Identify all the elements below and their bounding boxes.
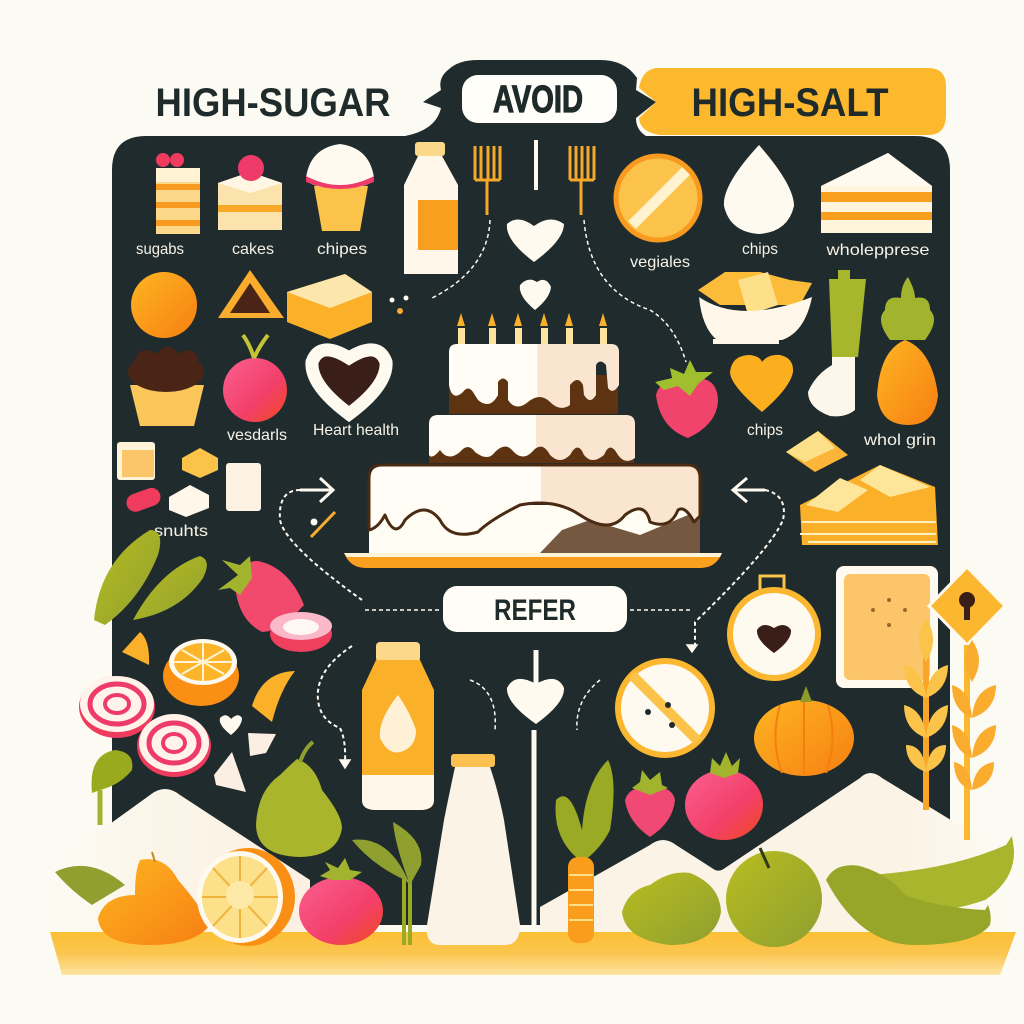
- label: chips: chips: [747, 422, 783, 439]
- icon: sliced radish: [270, 612, 332, 652]
- icon: pear: [256, 742, 342, 857]
- icon: heart: [730, 355, 793, 412]
- icon: small white pieces: [214, 715, 276, 792]
- icon: heart outline: [312, 350, 386, 414]
- icon: small strawberry: [625, 770, 675, 837]
- label: heart health: Heart health: [313, 422, 399, 439]
- icon: bottle: [404, 142, 458, 274]
- dark background panel: [112, 60, 950, 925]
- icon: chocolate cupcake: [128, 347, 204, 426]
- label: sugabs: sugabs: [136, 241, 184, 258]
- left salt mound: [60, 789, 310, 932]
- icon: chocolate triangle: [218, 270, 284, 318]
- heading: refer pill: [443, 586, 627, 632]
- icon: no sign: [616, 156, 700, 240]
- ground band: [50, 932, 1016, 975]
- icon: no sign lower: [618, 661, 712, 755]
- icon: orange slice: [163, 639, 239, 706]
- label: vesdarls: vesdarls: [227, 427, 287, 444]
- icon: orange fruit: [55, 852, 210, 945]
- label: whol grin: whol grin: [863, 432, 936, 449]
- heading: avoid pill: AVOID: [493, 79, 583, 121]
- icon: leaves: [94, 530, 207, 625]
- arrows and dashed connectors: [280, 478, 784, 932]
- label: cakes: cakes: [232, 241, 274, 258]
- icon: chip pieces: [786, 431, 848, 472]
- heading: high-salt banner: [639, 68, 946, 135]
- label: vegiales: vegiales: [630, 254, 690, 271]
- icon: pumpkin: [754, 686, 854, 776]
- icon: citrus half: [197, 848, 295, 946]
- icon: cupcake: [306, 144, 374, 231]
- icon: chip bowl: [698, 272, 812, 344]
- heading: avoid pill: [462, 75, 617, 123]
- right salt mounds: [540, 773, 1000, 932]
- icon: white tiered cake: [344, 313, 722, 568]
- icon: green apple: [726, 848, 822, 947]
- icon: bananas: [826, 836, 1014, 945]
- icon: heart centre: [507, 679, 564, 724]
- icon: dots: [390, 296, 408, 314]
- icon: chip stack: [800, 465, 938, 545]
- label: whole ppresse: wholepprese: [825, 242, 930, 259]
- icon: slash and dot: [310, 512, 335, 537]
- icon: milk bottle: [427, 754, 520, 945]
- icon: clock with heart: [730, 576, 818, 678]
- icon: wheat stalks: [904, 618, 996, 810]
- icon: strawberry left: [218, 556, 304, 632]
- icon: apple pink: [685, 752, 763, 840]
- icon: cheese block: [287, 274, 372, 339]
- icon: cake wedge: [821, 153, 932, 233]
- icon: forks and heart with dashed lines: [432, 140, 686, 362]
- icon: sprout and carrot: [556, 760, 614, 943]
- label: chips: chips: [742, 241, 778, 258]
- label: snuhts: snuhts: [154, 523, 208, 540]
- icon: pineapple: [877, 277, 938, 425]
- icon: triangles: [122, 632, 295, 722]
- label: chipes: chipes: [317, 241, 367, 258]
- icon: strawberry: [655, 360, 718, 438]
- icon: small sprout: [91, 750, 132, 825]
- icon: warning sign: [929, 567, 1005, 840]
- heading: high-salt banner: HIGH-SALT: [692, 81, 888, 125]
- icon: tomato: [299, 858, 383, 945]
- icon: yogurt bottle: [362, 642, 434, 810]
- icon: cake cube: [218, 155, 282, 230]
- icon: green mango: [622, 872, 721, 945]
- icon: salt drop: [724, 145, 794, 234]
- icon: layer cake slice: [156, 153, 200, 234]
- heading: refer pill: REFER: [494, 594, 576, 627]
- icon: cracker: [836, 566, 938, 688]
- icon: pink fruit: [223, 335, 287, 422]
- icon: orange: [131, 272, 197, 338]
- candles: [457, 313, 607, 344]
- icon: leek: [808, 270, 866, 416]
- icon: bottom left plant: [352, 822, 421, 945]
- icon: cubes: [117, 442, 261, 517]
- icon: swirl candies: [79, 676, 211, 777]
- heading: high-sugar: HIGH-SUGAR: [156, 81, 391, 125]
